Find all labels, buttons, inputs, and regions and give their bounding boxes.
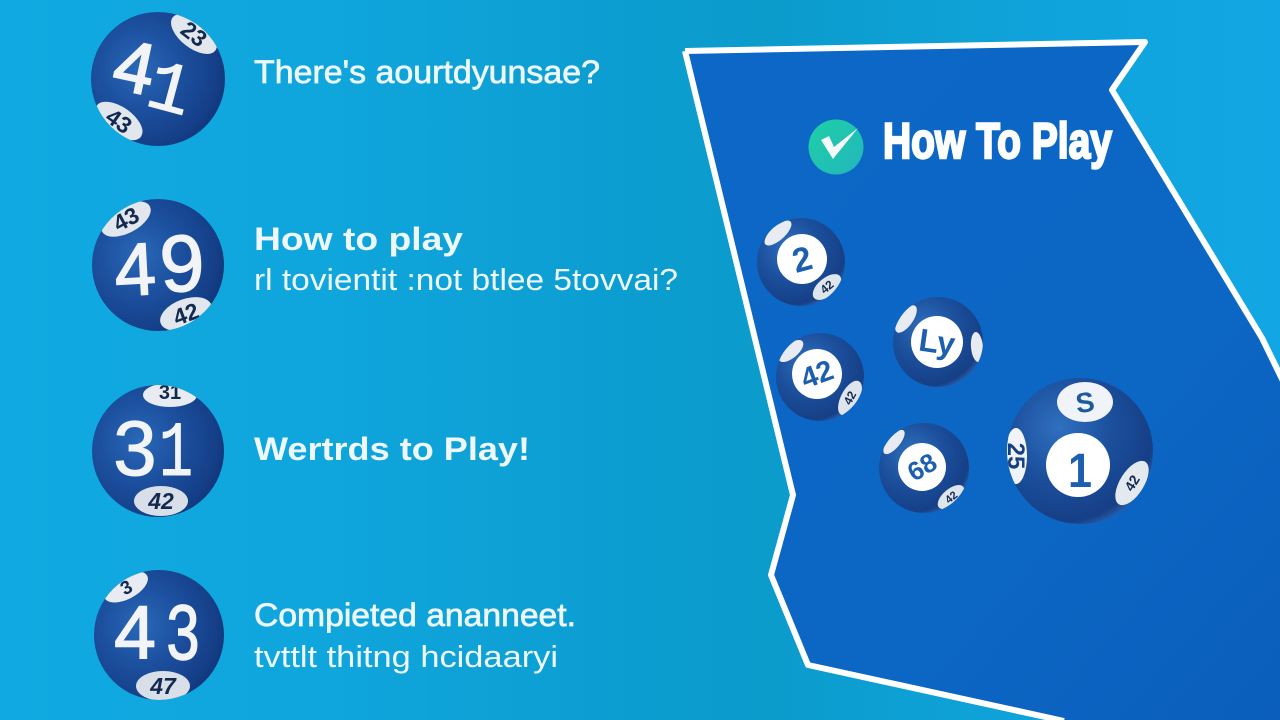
ball: 31 xyxy=(92,382,224,517)
heading: how to play: How To Play xyxy=(883,113,1112,169)
text block: how to play: rl tovientit :not btlee 5tovvai? xyxy=(254,262,678,297)
ball: 43: 3 xyxy=(117,577,136,600)
ball: Ly xyxy=(891,297,984,387)
ball: 31: 3 xyxy=(113,404,157,492)
ball: 1: 42 xyxy=(1121,472,1143,494)
ball: 31: 1 xyxy=(159,411,193,499)
ball: 42 xyxy=(775,333,867,421)
ball: 1: S xyxy=(1074,386,1096,419)
icon: green check badge xyxy=(808,120,864,174)
panel: how to play xyxy=(685,42,1280,720)
ball: 2: 2 xyxy=(788,239,816,281)
ball: 49: 9 xyxy=(158,218,207,309)
ball: 49 xyxy=(92,194,224,337)
ball: 1 xyxy=(1002,378,1155,524)
ball: 68: 42 xyxy=(943,489,960,506)
text block: fourth item: tvttlt thitng hcidaaryi xyxy=(254,639,558,674)
ball: 2: 42 xyxy=(817,277,837,297)
ball: 41: 1 xyxy=(138,47,201,137)
ball: 49: 4 xyxy=(112,227,158,312)
ball: 31: 31 xyxy=(159,382,181,404)
text block: first question: There's aourtdyunsae? xyxy=(254,54,600,90)
ball: 43: 4 xyxy=(114,590,156,674)
ball: 42: 42 xyxy=(797,354,838,395)
ball: 49: 43 xyxy=(109,202,143,236)
ball: 68 xyxy=(879,423,969,513)
ball: 43: 3 xyxy=(166,588,200,676)
ball: 41: 4 xyxy=(107,25,162,111)
ball: 43: 47 xyxy=(149,673,177,699)
text block: fourth item: Compieted ananneet. xyxy=(254,597,576,633)
ball: 41 xyxy=(89,6,225,148)
ball: 1: 25 xyxy=(1002,443,1029,469)
ball: 68: 68 xyxy=(902,447,942,487)
text block: how to play: How to play xyxy=(254,221,463,257)
ball: 1: 1 xyxy=(1068,445,1092,498)
text block: fourth item xyxy=(254,597,576,674)
text block: how to play xyxy=(254,221,678,297)
ball: 49: 42 xyxy=(170,297,202,331)
ball: 42: 42 xyxy=(841,389,859,407)
ball: Ly: Ly xyxy=(917,322,958,362)
ball: 2 xyxy=(757,216,846,306)
ball: 31: 42 xyxy=(147,488,174,514)
ball: 43 xyxy=(94,565,224,701)
text block: third item: Wertrds to Play! xyxy=(254,431,530,467)
ball: 41: 23 xyxy=(176,16,212,52)
ball: 41: 43 xyxy=(101,103,137,139)
